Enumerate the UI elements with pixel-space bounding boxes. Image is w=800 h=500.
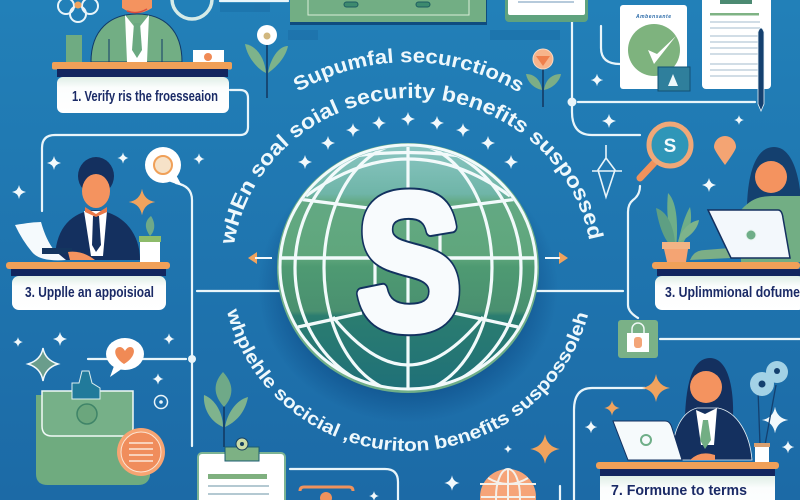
icon: orange map pin xyxy=(714,136,736,165)
icon: potted plant xyxy=(139,216,161,262)
panel: step 3 documents worker xyxy=(640,124,800,310)
figure: navy suit person xyxy=(55,157,140,260)
figure: woman with green top xyxy=(741,147,800,262)
step label: 3. Upplle an appoisioal xyxy=(25,285,154,301)
icon: target ring xyxy=(154,396,168,408)
icon: outlined star xyxy=(28,348,58,381)
small badge xyxy=(658,67,690,91)
label card xyxy=(57,77,229,113)
globe letter S: S xyxy=(357,155,461,370)
wallet body xyxy=(36,395,150,485)
clipboard page xyxy=(702,0,771,89)
panel: bottom-left wallet xyxy=(28,338,168,485)
step label: 1. Verify ris the froesseaion xyxy=(72,89,218,105)
orange arrows on equator xyxy=(248,252,568,264)
panel: top-right documents xyxy=(245,0,771,111)
laptop xyxy=(613,421,682,460)
wallet flap xyxy=(42,391,133,436)
clip xyxy=(225,438,259,461)
panel: step 3 appeal presenter xyxy=(6,157,170,310)
desk top xyxy=(52,62,232,77)
top centre green folder xyxy=(290,0,487,25)
orange stars xyxy=(129,189,670,464)
arc stars around globe xyxy=(298,112,518,169)
laptop xyxy=(708,210,790,258)
icon: padlock tag xyxy=(618,320,658,358)
icon: blue flowers xyxy=(750,361,788,462)
figure: green suit xyxy=(91,0,182,62)
label card xyxy=(655,276,800,310)
shadow under globe xyxy=(258,154,558,422)
clip xyxy=(72,371,100,399)
panel: step 7 worker xyxy=(596,358,788,500)
globe letter S: S xyxy=(357,155,461,370)
speech bubble heart xyxy=(106,338,144,377)
icon: orange list badge xyxy=(117,428,165,476)
top centre-right card xyxy=(505,0,588,22)
potted plant xyxy=(656,193,699,262)
icon: green cup xyxy=(66,35,82,62)
icon: speech bubble coin xyxy=(145,147,182,186)
icon: magnifier ring xyxy=(172,0,212,19)
lower heading: curved text: whplehle socicial ,ecuriton benefits suspossoleh xyxy=(228,308,588,452)
document with check xyxy=(620,5,687,89)
document with check: Ambensante xyxy=(635,14,671,20)
icon: flower xyxy=(58,0,98,22)
icon: flower sprout top centre-left xyxy=(245,25,288,98)
hand and papers xyxy=(42,248,95,260)
desk top xyxy=(596,462,779,476)
icon: name plate xyxy=(193,50,224,62)
top heading: curved text: Supumfal securctions xyxy=(294,48,522,91)
hand xyxy=(690,248,731,260)
main heading: curved text: wHEn soal soial security benefits suspossed xyxy=(222,82,604,243)
emblem xyxy=(77,404,97,424)
desk top xyxy=(6,262,170,276)
icon: paper sheet xyxy=(15,222,66,260)
icon: magnifier: S xyxy=(664,136,676,157)
icon: pen xyxy=(758,28,764,111)
icon: magnifier xyxy=(640,124,691,178)
desk top xyxy=(652,262,800,276)
clipboard sheet xyxy=(198,453,285,500)
figure: woman in navy suit xyxy=(672,358,752,460)
icon: sprout xyxy=(204,372,248,447)
central globe xyxy=(270,143,546,393)
panel: bottom clipboard xyxy=(198,372,285,500)
icon: orange scales element xyxy=(300,487,353,500)
shadow bands xyxy=(220,3,560,40)
label card xyxy=(12,276,166,310)
junction dots xyxy=(188,98,576,363)
hand xyxy=(690,453,715,460)
icon: orange globe xyxy=(480,469,536,500)
label card xyxy=(600,476,775,500)
icon: flower sprout left xyxy=(526,49,561,107)
icon: triangle network xyxy=(592,145,622,197)
panel: step 1 presenter xyxy=(52,0,232,113)
step label: 7. Formune to terms xyxy=(611,483,747,499)
